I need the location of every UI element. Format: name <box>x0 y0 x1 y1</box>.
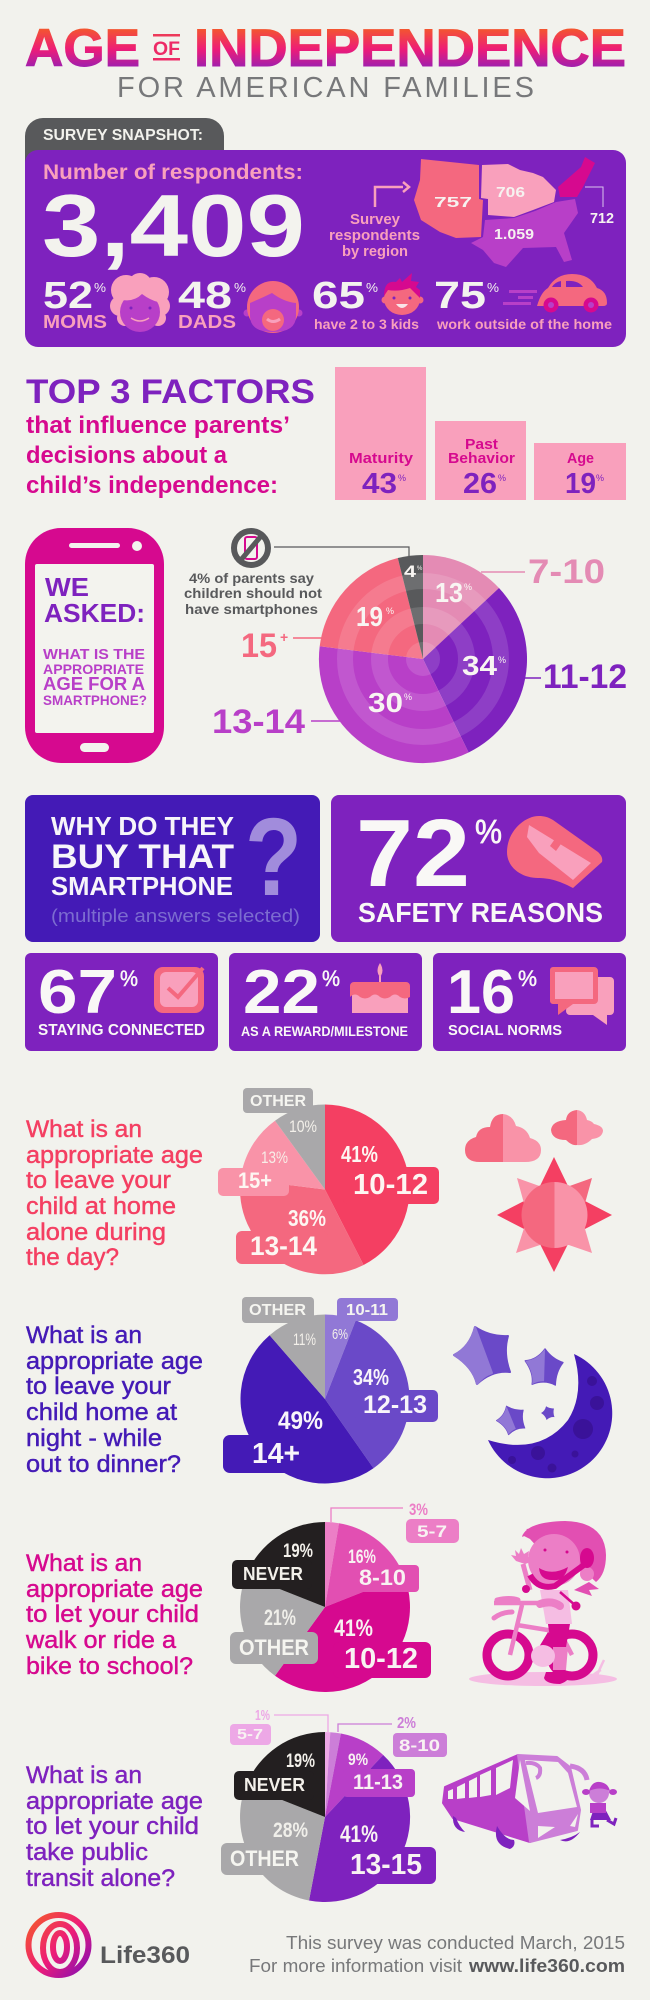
logo: Life360: Life360 <box>100 1942 190 1969</box>
map: US regions: 706 <box>496 184 525 201</box>
panel: staying connected: 67 <box>38 958 117 1027</box>
pie chart: home during day: 13% <box>261 1148 288 1167</box>
panel: safety reasons: % <box>475 813 502 850</box>
stat: dads: DADS <box>178 312 236 332</box>
panel: social norms <box>433 953 626 1051</box>
panel: reward <box>229 953 422 1051</box>
pie chart: smartphone age: 19 <box>356 601 383 632</box>
panel: safety reasons: SAFETY REASONS <box>358 897 603 928</box>
icon: no phone <box>234 531 409 565</box>
icon: clouds and sun <box>465 1110 612 1272</box>
panel: why do they buy <box>25 795 320 942</box>
stat: work: 75 <box>434 275 486 317</box>
question: public transit: to let your child <box>26 1813 199 1840</box>
pie chart: public transit: OTHER <box>230 1846 299 1871</box>
pie chart: smartphone age: 30 <box>368 687 403 718</box>
panel: why do they buy: SMARTPHONE <box>51 871 233 901</box>
stat: moms: 52 <box>43 275 93 317</box>
pie chart: smartphone age: 13 <box>435 577 463 608</box>
region caption: by region <box>342 243 408 260</box>
bar: maturity <box>335 367 426 500</box>
title: OF <box>153 39 180 60</box>
question: home alone during the day: alone during <box>26 1219 166 1246</box>
bar: maturity: Maturity <box>349 450 414 467</box>
illustration: girl walking <box>582 1782 617 1826</box>
pie chart: walk or bike: 16% <box>348 1547 376 1568</box>
panel: why do they buy: BUY THAT <box>51 838 234 876</box>
icon: moon and stars <box>454 1327 612 1478</box>
heading: top 3 factors: TOP 3 FACTORS <box>26 373 315 411</box>
question: walk or bike to school <box>25 1550 203 1680</box>
region caption <box>329 211 420 260</box>
pie chart: home during day: 10-12 <box>353 1169 428 1201</box>
question: public transit: What is an <box>26 1762 142 1789</box>
map: US regions: 1.059 <box>494 226 534 243</box>
icon: phone with question: ASKED: <box>44 598 145 628</box>
bar: past behavior: Past <box>465 436 498 453</box>
pie chart: smartphone age <box>319 555 527 763</box>
pie chart: home at night: 14+ <box>252 1438 300 1470</box>
pie chart: walk or bike: NEVER <box>243 1564 303 1584</box>
pie chart: home at night: 6% <box>332 1326 348 1343</box>
pie chart: home during day: 13-14 <box>250 1231 317 1261</box>
subheading: factors <box>26 412 290 499</box>
icon: whistle <box>507 816 602 888</box>
question: walk or bike to school: bike to school? <box>26 1653 193 1680</box>
stat: work <box>434 275 612 332</box>
question: home at night: appropriate age <box>26 1348 203 1375</box>
label: 15+ <box>241 627 322 665</box>
pie chart: public transit <box>221 1707 447 1902</box>
note: no smartphones: 4% of parents say <box>189 570 314 586</box>
icon: cake <box>350 963 410 1013</box>
panel: survey snapshot <box>25 118 626 347</box>
pie chart: home at night: OTHER <box>249 1302 306 1319</box>
pie chart: home at night: 10-11 <box>346 1302 388 1319</box>
icon: phone with question: SMARTPHONE? <box>43 692 147 708</box>
logo: Life360 <box>28 1915 190 1975</box>
question: home alone during the day: appropriate age <box>26 1142 203 1169</box>
stat: work: % <box>487 280 499 295</box>
icon: kid face <box>382 273 424 315</box>
stat: kids: % <box>366 280 378 295</box>
pie chart: public transit: 9% <box>348 1750 368 1769</box>
region caption: Survey <box>350 211 401 228</box>
pie chart: walk or bike: 10-12 <box>344 1643 418 1675</box>
question: public transit: appropriate age <box>26 1788 203 1815</box>
icon: checkbox <box>154 967 204 1013</box>
illustration: bus <box>443 1755 587 1849</box>
pie chart: smartphone age: % <box>404 692 412 702</box>
question: public transit <box>26 1762 203 1892</box>
pie chart: home at night: 12-13 <box>363 1391 427 1419</box>
stat: work: work outside of the home <box>436 316 612 332</box>
footer note: www.life360.com <box>468 1956 625 1976</box>
label: 13-14: 13-14 <box>212 703 305 741</box>
pie chart: smartphone age: % <box>386 606 394 616</box>
pie chart: home during day: 36% <box>288 1205 326 1231</box>
panel: why do they buy: WHY DO THEY <box>51 811 234 841</box>
region arrow <box>375 182 409 207</box>
icon: chat bubbles <box>550 967 614 1025</box>
map: US regions: 712 <box>590 210 614 227</box>
stat: dads: % <box>234 280 246 295</box>
pie chart: smartphone age: 34 <box>462 650 497 681</box>
pie chart: walk or bike: 3% <box>409 1500 428 1519</box>
bar: age: Age <box>567 450 594 467</box>
icon: dad face <box>244 281 302 333</box>
icon: phone with question: APPROPRIATE <box>43 661 144 677</box>
label: 7-10 <box>481 553 605 591</box>
pie chart: public transit: 11-13 <box>353 1771 403 1794</box>
panel: why do they buy: ? <box>245 796 302 919</box>
question: home at night: child home at <box>26 1399 177 1426</box>
pie chart: public transit: 41% <box>340 1821 378 1848</box>
panel: staying connected: % <box>120 966 138 991</box>
question: home at night: night - while <box>26 1425 162 1452</box>
stat: kids: 65 <box>312 275 365 317</box>
footer note: This survey was conducted March, 2015 <box>286 1933 625 1953</box>
footer note <box>249 1933 625 1976</box>
illustration: kid on bike <box>469 1521 617 1686</box>
question: walk or bike to school: to let your child <box>26 1601 199 1628</box>
stat: moms: % <box>94 280 106 295</box>
pie chart: walk or bike: 8-10 <box>359 1565 406 1590</box>
subheading: factors: child’s independence: <box>26 472 278 499</box>
pie chart: public transit: 5-7 <box>237 1726 263 1743</box>
bar: past behavior: Behavior <box>448 450 515 467</box>
pie chart: walk or bike: 19% <box>283 1541 313 1562</box>
pie chart: walk or bike: 5-7 <box>417 1522 447 1541</box>
panel: reward: 22 <box>243 958 320 1027</box>
region caption: respondents <box>329 227 420 244</box>
pie chart: walk or bike: OTHER <box>239 1635 309 1660</box>
panel: social norms: SOCIAL NORMS <box>448 1022 562 1039</box>
pie chart: smartphone age: % <box>464 582 472 592</box>
pie chart: public transit: 8-10 <box>399 1736 440 1755</box>
pie chart: public transit: NEVER <box>244 1775 305 1795</box>
question: walk or bike to school: What is an <box>26 1550 142 1577</box>
question: public transit: take public <box>26 1839 148 1866</box>
pie chart: public transit: 1% <box>255 1707 270 1724</box>
panel: reward: AS A REWARD/MILESTONE <box>241 1023 408 1039</box>
pie chart: public transit: 28% <box>273 1819 308 1842</box>
stat: dads <box>178 275 246 332</box>
icon: mom face <box>110 273 170 332</box>
label: 15+: + <box>280 629 288 645</box>
question: home alone during the day <box>26 1116 203 1271</box>
respondents number: 3,409 <box>42 176 305 275</box>
panel: staying connected <box>25 953 218 1051</box>
stat: moms <box>43 275 107 332</box>
icon: phone with question <box>25 528 164 763</box>
pie chart: home at night: 49% <box>278 1407 323 1435</box>
subtitle: FOR AMERICAN FAMILIES <box>117 72 534 104</box>
question: home alone during the day: What is an <box>26 1116 142 1143</box>
pie chart: smartphone age: % <box>498 655 506 665</box>
pie chart: walk or bike: 41% <box>334 1615 373 1642</box>
question: home at night: out to dinner? <box>26 1451 181 1478</box>
question: home alone during the day: to leave your <box>26 1167 171 1194</box>
icon: phone with question: WHAT IS THE <box>43 646 145 663</box>
icon: phone with question: AGE FOR A <box>43 674 145 694</box>
question: public transit: transit alone? <box>26 1865 175 1892</box>
pie chart: walk or bike <box>230 1500 459 1692</box>
panel: social norms: % <box>518 966 537 991</box>
panel: staying connected: STAYING CONNECTED <box>38 1022 205 1039</box>
question: walk or bike to school: appropriate age <box>26 1576 203 1603</box>
question: home alone during the day: child at home <box>26 1193 176 1220</box>
pie chart: home at night: 11% <box>293 1330 316 1349</box>
icon: phone with question: WE <box>45 572 89 602</box>
subheading: factors: decisions about a <box>26 442 228 469</box>
pie chart: home at night: 34% <box>353 1364 389 1390</box>
pie chart: smartphone age: 4 <box>404 562 417 581</box>
panel: social norms: 16 <box>447 958 515 1027</box>
bar: past behavior <box>435 421 526 500</box>
map: US regions <box>414 157 614 267</box>
bar: age: 19 <box>565 468 596 500</box>
pie chart: public transit: 2% <box>397 1715 416 1732</box>
panel: safety reasons <box>331 795 626 942</box>
icon: car <box>503 274 607 312</box>
note: no smartphones: have smartphones <box>185 601 318 617</box>
panel: why do they buy: (multiple answers selected) <box>51 906 300 926</box>
pie chart: smartphone age: % <box>417 566 423 572</box>
title: AGE <box>25 19 140 78</box>
label: 13-14 <box>212 703 340 741</box>
footer note: For more information visit <box>249 1956 462 1976</box>
subheading: factors: that influence parents’ <box>26 412 290 439</box>
stat: kids: have 2 to 3 kids <box>314 316 419 332</box>
pie chart: public transit: 13-15 <box>350 1849 422 1881</box>
pie chart: home during day: 41% <box>341 1141 378 1167</box>
bar: age <box>534 443 626 500</box>
label: 11-12: 11-12 <box>543 658 627 696</box>
title: INDEPENDENCE <box>194 19 626 78</box>
panel: reward: % <box>322 966 340 991</box>
respondents heading: Number of respondents: <box>43 161 303 184</box>
note: no smartphones <box>184 570 322 617</box>
pie chart: home at night <box>223 1297 438 1484</box>
note: no smartphones: children should not <box>184 585 322 601</box>
stat: kids <box>312 275 419 332</box>
label: 15+: 15 <box>241 627 277 665</box>
question: walk or bike to school: walk or ride a <box>25 1627 177 1654</box>
question: home alone during the day: the day? <box>26 1244 119 1271</box>
panel background <box>25 150 626 347</box>
tab: survey snapshot <box>25 118 224 175</box>
bar: past behavior: % <box>498 473 506 483</box>
pie chart: home during day: OTHER <box>250 1093 306 1110</box>
stat: moms: MOMS <box>43 312 107 332</box>
pie chart: home during day: 15+ <box>238 1168 272 1193</box>
bar: past behavior: 26 <box>463 468 497 500</box>
pie chart: home during day <box>218 1088 439 1274</box>
pie chart: public transit: 19% <box>286 1751 315 1772</box>
tab: survey snapshot: SURVEY SNAPSHOT: <box>43 127 203 144</box>
question: home at night <box>26 1322 203 1478</box>
pie chart: walk or bike: 21% <box>264 1605 296 1630</box>
bar: maturity: % <box>398 473 406 483</box>
bar: maturity: 43 <box>362 468 397 500</box>
map: US regions: 757 <box>434 194 472 211</box>
question: home at night: What is an <box>26 1322 142 1349</box>
label: 7-10: 7-10 <box>528 553 605 591</box>
panel: safety reasons: 72 <box>356 800 470 907</box>
bar: age: % <box>596 473 604 483</box>
stat: dads: 48 <box>178 275 232 317</box>
question: home at night: to leave your <box>26 1373 171 1400</box>
pie chart: home during day: 10% <box>289 1117 317 1136</box>
